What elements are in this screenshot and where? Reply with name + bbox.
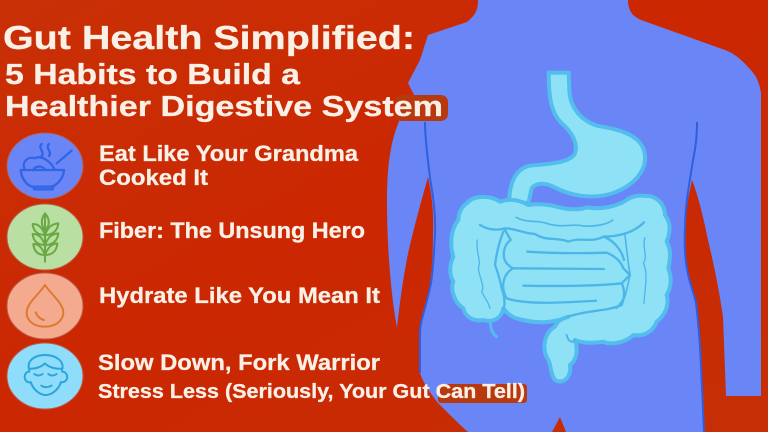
habit 3 text: Hydrate Like You Mean It xyxy=(99,283,381,308)
habit 2 text: Fiber: The Unsung Hero xyxy=(99,218,365,243)
title: 5 Habits to Build a xyxy=(5,59,301,91)
habit 1: eat like your grandma: Cooked It xyxy=(99,165,209,190)
digestive system illustration xyxy=(450,73,671,381)
habit 4: slow down and stress less xyxy=(7,343,527,409)
highlight behind subtitle end xyxy=(438,384,527,403)
icon: bowl xyxy=(7,133,83,199)
habit 2: fiber xyxy=(7,204,365,270)
title: Gut Health Simplified: xyxy=(3,19,415,56)
habit 4 text: Slow Down, Fork Warrior xyxy=(98,350,380,375)
icon: calm face xyxy=(7,343,83,409)
stomach and esophagus xyxy=(509,73,645,203)
title xyxy=(3,19,448,123)
icon: water drop xyxy=(7,273,83,339)
habit 1: eat like your grandma xyxy=(7,133,359,199)
habit 1 text: Eat Like Your Grandma xyxy=(99,141,359,166)
icon: wheat xyxy=(7,204,83,270)
body silhouette xyxy=(387,0,761,432)
title: Healthier Digestive System xyxy=(5,91,443,123)
colon and small intestine xyxy=(450,196,671,381)
habit 3: hydrate xyxy=(7,273,381,339)
highlight behind title end xyxy=(395,95,448,121)
habit 4: slow down and stress less: Stress Less (Seriously, Your Gut Can Tell) xyxy=(98,380,525,403)
intestine folds xyxy=(477,217,646,342)
